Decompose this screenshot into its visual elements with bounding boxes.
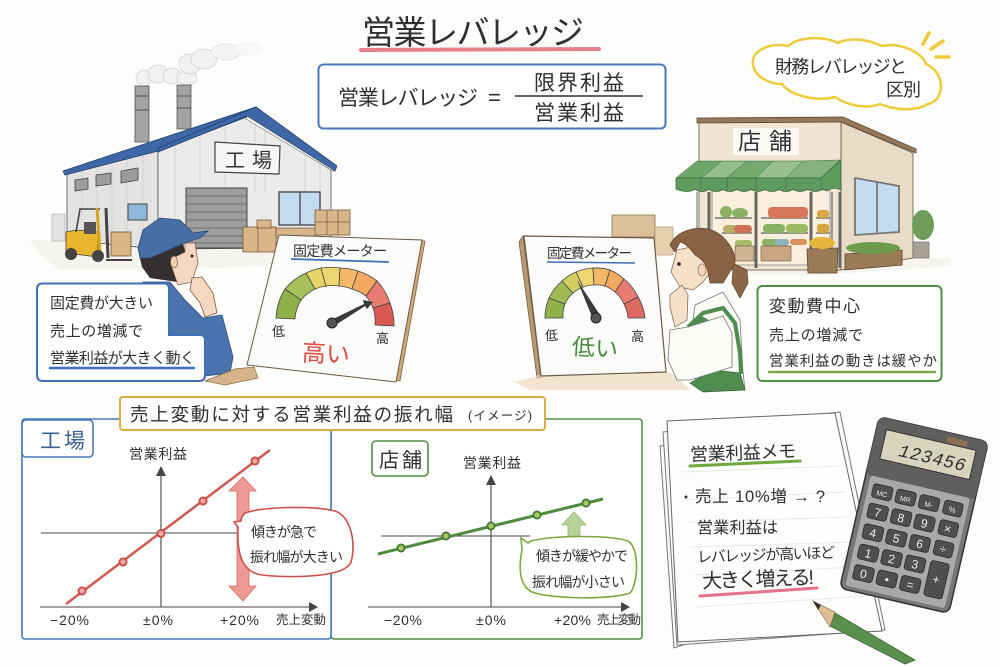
ground bbox=[30, 240, 345, 270]
green line bbox=[378, 499, 603, 554]
storefront bbox=[712, 190, 830, 265]
meter board: low: 低い bbox=[571, 333, 619, 363]
roof bbox=[63, 107, 257, 175]
formula box: 限界利益 bbox=[534, 72, 624, 95]
red line bbox=[66, 450, 270, 604]
shutter bbox=[186, 188, 247, 248]
needle bbox=[577, 280, 600, 319]
awning bbox=[676, 161, 722, 178]
meter board: high: 低 bbox=[272, 324, 285, 339]
calculator: 0 bbox=[859, 567, 869, 582]
formula box: 営業利益 bbox=[534, 102, 624, 125]
calculator: M- bbox=[924, 501, 934, 510]
smoke bbox=[136, 43, 262, 86]
chimneys bbox=[135, 86, 149, 142]
panel: factory chart: 売上変動 bbox=[276, 612, 326, 627]
gauge arc bbox=[276, 267, 394, 326]
meter board: low: 固定費メーター bbox=[547, 246, 632, 261]
memo notepad: 大きく増える! bbox=[702, 566, 814, 593]
keys bbox=[852, 483, 964, 599]
callout: financial leverage cloud: 財務レバレッジと bbox=[775, 57, 907, 77]
up arrow bbox=[562, 512, 586, 536]
callout: store: 売上の増減で bbox=[769, 327, 863, 344]
display bbox=[880, 430, 976, 480]
panel: factory chart: 傾きが急で bbox=[251, 524, 317, 540]
callout: financial leverage cloud: 区別 bbox=[886, 80, 921, 100]
illustration: store clerk bbox=[668, 228, 748, 392]
panel: store chart: ±0% bbox=[476, 612, 506, 628]
axes bbox=[368, 480, 626, 607]
illustration: factory worker bbox=[138, 218, 233, 376]
sign bbox=[215, 142, 280, 174]
calculator: 7 bbox=[873, 505, 883, 520]
calculator: 4 bbox=[868, 526, 878, 541]
calculator: 2 bbox=[887, 551, 897, 567]
pencil bbox=[813, 601, 915, 664]
windows bbox=[279, 192, 320, 225]
panel: store chart bbox=[331, 419, 642, 639]
title: 営業レバレッジ bbox=[362, 14, 584, 51]
cartons bbox=[612, 215, 655, 237]
meter board: high: 固定費メーター bbox=[293, 243, 387, 259]
calculator: 6 bbox=[915, 536, 925, 552]
calculator: MR bbox=[899, 495, 911, 505]
crates and produce bbox=[807, 248, 838, 273]
callout: store: 変動費中心 bbox=[769, 297, 860, 316]
panel: factory chart: 振れ幅が大きい bbox=[250, 549, 343, 565]
front wall bbox=[158, 116, 331, 249]
memo notepad: 営業利益は bbox=[697, 519, 778, 537]
chart heading: 売上変動に対する営業利益の振れ幅 bbox=[130, 404, 453, 425]
needle bbox=[331, 300, 373, 326]
store tag bbox=[372, 441, 428, 476]
calculator: 9 bbox=[920, 516, 929, 531]
meter board: low: 高 bbox=[631, 329, 644, 344]
callout: store: 営業利益の動きは緩やか bbox=[769, 353, 937, 370]
calculator: = bbox=[905, 577, 915, 593]
calculator: MC bbox=[876, 490, 888, 499]
calculator: % bbox=[948, 505, 957, 515]
crates bbox=[243, 227, 276, 252]
calculator: 1 bbox=[863, 546, 873, 561]
calculator: 3 bbox=[910, 557, 920, 572]
meter board: high: 高 bbox=[376, 331, 389, 346]
meter board: low bbox=[515, 236, 690, 390]
chart heading bbox=[120, 397, 545, 430]
store tag: 店舗 bbox=[379, 449, 422, 472]
callout: factory: 営業利益が大きく動く bbox=[50, 350, 195, 367]
calculator: × bbox=[943, 521, 953, 537]
formula box: = bbox=[488, 85, 501, 110]
chart heading: (イメージ) bbox=[468, 409, 532, 423]
gauge arc bbox=[545, 268, 645, 318]
double arrow bbox=[229, 477, 256, 601]
calculator: 8 bbox=[896, 511, 906, 526]
formula box bbox=[318, 64, 666, 128]
speech bubble bbox=[234, 507, 353, 577]
calculator: 123456 bbox=[897, 442, 967, 477]
callout: factory: 売上の増減で bbox=[50, 323, 143, 340]
calculator: • bbox=[883, 572, 890, 587]
memo notepad: レバレッジが高いほど bbox=[697, 545, 835, 566]
plant bbox=[912, 210, 934, 240]
panel: store chart: 傾きが緩やかで bbox=[536, 548, 628, 564]
axis labels: −20% bbox=[384, 612, 422, 628]
calculator: 5 bbox=[891, 531, 901, 546]
calculator bbox=[840, 417, 988, 613]
panel: store chart: 営業利益 bbox=[463, 455, 521, 471]
memo notepad bbox=[660, 412, 885, 648]
meter board: high: 高い bbox=[301, 340, 351, 369]
memo notepad: 営業利益メモ bbox=[690, 441, 796, 465]
panel: store chart: 振れ幅が小さい bbox=[532, 574, 625, 590]
callout: factory bbox=[37, 284, 205, 381]
panel: factory chart bbox=[22, 419, 353, 639]
illustration: factory: 工場 bbox=[225, 149, 272, 172]
memo notepad: 売上 10%増 → ? bbox=[695, 487, 825, 506]
calculator: ÷ bbox=[938, 542, 948, 557]
forklift bbox=[66, 230, 98, 257]
illustration: factory bbox=[30, 43, 350, 270]
formula box: 営業レバレッジ bbox=[338, 87, 478, 110]
panel: store chart: +20% bbox=[554, 612, 591, 628]
meter board: low: 低 bbox=[545, 328, 558, 343]
panel: factory chart: ±0% bbox=[143, 612, 173, 628]
illustration: store bbox=[612, 117, 950, 275]
callout: store bbox=[758, 286, 942, 381]
speech bubble bbox=[520, 536, 636, 598]
calculator: + bbox=[931, 572, 941, 587]
callout: financial leverage cloud bbox=[753, 33, 949, 109]
panel: factory chart: 営業利益 bbox=[129, 446, 187, 462]
left wall bbox=[67, 151, 158, 249]
meter board: high bbox=[205, 235, 425, 385]
axis labels: −20% bbox=[50, 612, 89, 628]
panel: factory chart: +20% bbox=[220, 612, 259, 628]
side window bbox=[855, 178, 899, 235]
illustration: store: 店舗 bbox=[738, 128, 792, 154]
factory tag: 工場 bbox=[40, 430, 85, 453]
panel: store chart: 売上変動 bbox=[597, 612, 641, 627]
factory tag bbox=[22, 420, 93, 457]
callout: factory: 固定費が大きい bbox=[50, 295, 153, 312]
store sign bbox=[733, 128, 799, 155]
axes bbox=[40, 470, 314, 607]
